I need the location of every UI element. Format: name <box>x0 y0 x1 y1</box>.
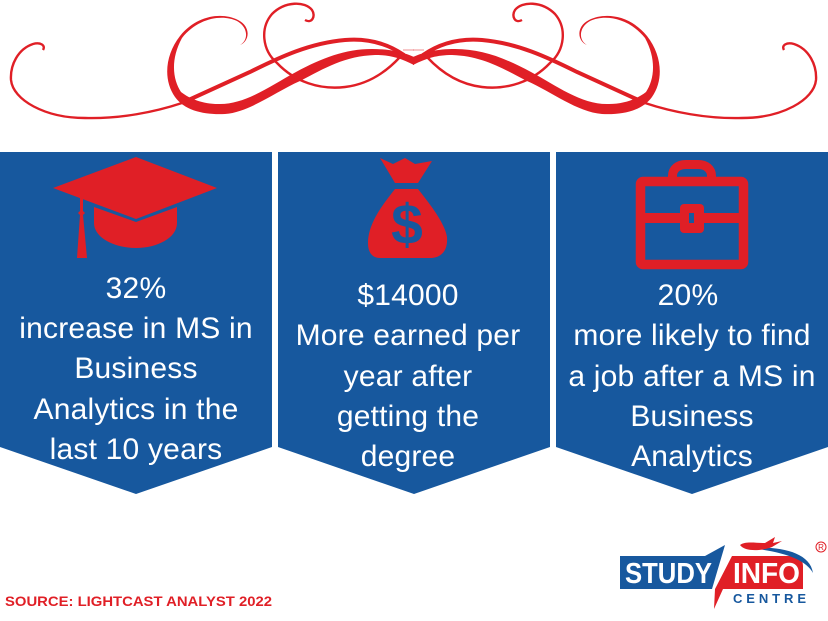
text: 32 percent increase: 32% <box>106 272 166 305</box>
text: 20 percent more likely: 20% <box>658 279 718 312</box>
icon: graduation cap <box>53 157 217 258</box>
ornamental flourish <box>11 4 816 118</box>
text: 32 percent increase: increase in MS in <box>19 312 253 345</box>
text: 14000 dollars more: degree <box>361 440 455 473</box>
text: 32 percent increase: Business <box>74 352 198 385</box>
text: 14000 dollars more: year after <box>344 360 472 393</box>
text: 14000 dollars more: $14000 <box>357 279 459 312</box>
text: 14000 dollars more: getting the <box>337 400 479 433</box>
panel: earnings <box>278 152 550 494</box>
panel: graduate programme growth <box>0 152 272 494</box>
text: 20 percent more likely: Business <box>630 400 754 433</box>
logo: Study Info Centre: CENTRE <box>733 591 806 606</box>
text: 32 percent increase: last 10 years <box>50 433 222 466</box>
icon: briefcase <box>640 164 744 264</box>
logo: Study Info Centre: INFO <box>733 558 800 590</box>
logo: Study Info Centre: STUDY <box>625 558 712 590</box>
text: 20 percent more likely: more likely to find <box>573 319 811 352</box>
logo: Study Info Centre <box>620 537 826 609</box>
panel: employment <box>556 152 828 494</box>
text: 20 percent more likely: a job after a MS in <box>568 360 816 393</box>
logo: Study Info Centre: R <box>818 543 824 552</box>
source note: SOURCE: LIGHTCAST ANALYST 2022 <box>5 593 272 609</box>
text: 14000 dollars more: More earned per <box>296 319 520 352</box>
text: 20 percent more likely: Analytics <box>631 440 753 473</box>
icon: money bag <box>368 158 447 258</box>
text: 32 percent increase: Analytics in the <box>34 393 238 426</box>
icon: money bag: $ <box>391 193 423 257</box>
